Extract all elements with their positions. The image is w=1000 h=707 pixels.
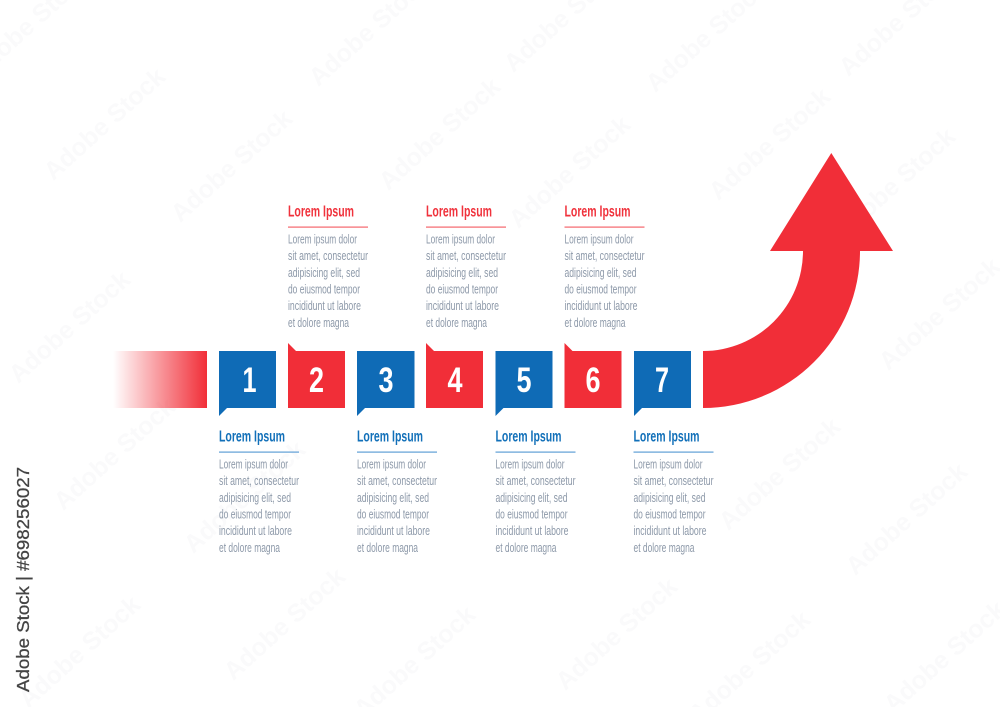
text block: step 5: incididunt ut labore xyxy=(496,524,569,538)
step 1 marker xyxy=(219,351,276,416)
text block: step 1: incididunt ut labore xyxy=(219,524,292,538)
watermark pattern: Adobe Stock xyxy=(374,72,506,196)
step 6 marker xyxy=(564,343,622,408)
watermark pattern: Adobe Stock xyxy=(714,412,846,536)
text block: step 3: do eiusmod tempor xyxy=(357,508,429,522)
watermark pattern: Adobe Stock xyxy=(829,122,961,246)
text block: step 6: do eiusmod tempor xyxy=(564,282,636,296)
text block: step 3: incididunt ut labore xyxy=(357,524,430,538)
text block: step 4: do eiusmod tempor xyxy=(426,282,498,296)
text block: step 2: adipisicing elit, sed xyxy=(288,266,360,280)
text block: step 4: Lorem Ipsum xyxy=(426,204,492,221)
step 5 marker xyxy=(496,351,552,416)
watermark pattern: Adobe Stock xyxy=(4,265,136,389)
text block: step 6: sit amet, consectetur xyxy=(564,249,644,263)
watermark pattern: Adobe Stock xyxy=(504,110,636,234)
text block: step 3: Lorem Ipsum xyxy=(357,429,423,446)
step 3 marker: 3 xyxy=(378,361,394,400)
text block: step 1: sit amet, consectetur xyxy=(219,474,299,488)
text block: step 7: incididunt ut labore xyxy=(634,524,707,538)
text block: step 4: et dolore magna xyxy=(426,316,487,330)
watermark pattern: Adobe Stock xyxy=(166,104,298,228)
text block: step 2: incididunt ut labore xyxy=(288,299,361,313)
watermark pattern: Adobe Stock xyxy=(219,562,351,686)
text block: step 2: Lorem Ipsum xyxy=(288,204,354,221)
watermark pattern: Adobe Stock xyxy=(39,62,171,186)
text block: step 4: incididunt ut labore xyxy=(426,299,499,313)
text block: step 6: adipisicing elit, sed xyxy=(564,266,637,280)
text block: step 6: incididunt ut labore xyxy=(564,299,638,313)
text block: step 6: Lorem ipsum dolor xyxy=(564,232,634,246)
text block: step 6: et dolore magna xyxy=(564,316,626,330)
text block: step 7: adipisicing elit, sed xyxy=(634,491,706,505)
large curved red arrow xyxy=(703,153,893,408)
text block: step 6: Lorem Ipsum xyxy=(564,204,630,221)
text block: step 4: adipisicing elit, sed xyxy=(426,266,498,280)
text block: step 2: do eiusmod tempor xyxy=(288,282,360,296)
text block: step 2 xyxy=(288,204,368,330)
text block: step 1: do eiusmod tempor xyxy=(219,508,291,522)
text block: step 7 xyxy=(634,429,714,555)
step 7 marker xyxy=(634,351,691,416)
text block: step 1 xyxy=(219,429,299,555)
watermark pattern: Adobe Stock xyxy=(49,392,181,516)
text block: step 4 xyxy=(426,204,506,330)
text block: step 3: sit amet, consectetur xyxy=(357,474,437,488)
watermark pattern: Adobe Stock xyxy=(841,457,973,581)
text block: step 3 xyxy=(357,429,437,555)
text block: step 7: et dolore magna xyxy=(634,541,695,555)
step 1 marker: 1 xyxy=(242,361,256,400)
text block: step 1: Lorem Ipsum xyxy=(219,429,285,446)
step 2 marker xyxy=(288,343,345,408)
text block: step 5: adipisicing elit, sed xyxy=(496,491,568,505)
watermark pattern: Adobe Stock xyxy=(179,435,311,559)
step 4 marker: 4 xyxy=(448,361,463,400)
fading red arrow tail xyxy=(113,351,207,408)
text block: step 3: et dolore magna xyxy=(357,541,418,555)
text block: step 1: adipisicing elit, sed xyxy=(219,491,291,505)
text block: step 5: sit amet, consectetur xyxy=(496,474,576,488)
text block: step 4: Lorem ipsum dolor xyxy=(426,232,495,246)
text block: step 5: et dolore magna xyxy=(496,541,557,555)
text block: step 2: Lorem ipsum dolor xyxy=(288,232,357,246)
watermark pattern: Adobe Stock xyxy=(704,82,836,206)
step 7 marker: 7 xyxy=(655,361,669,400)
text block: step 7: sit amet, consectetur xyxy=(634,474,714,488)
text block: step 7: do eiusmod tempor xyxy=(634,508,706,522)
text block: step 1: et dolore magna xyxy=(219,541,280,555)
step 6 marker: 6 xyxy=(586,361,600,400)
text block: step 3: adipisicing elit, sed xyxy=(357,491,429,505)
step 3 marker xyxy=(357,351,414,416)
step 5 marker: 5 xyxy=(516,361,532,400)
watermark pattern: Adobe Stock xyxy=(551,572,683,696)
text block: step 5: Lorem Ipsum xyxy=(496,429,562,446)
text block: step 2: sit amet, consectetur xyxy=(288,249,368,263)
text block: step 4: sit amet, consectetur xyxy=(426,249,506,263)
text block: step 3: Lorem ipsum dolor xyxy=(357,458,426,472)
text block: step 2: et dolore magna xyxy=(288,316,349,330)
text block: step 5: do eiusmod tempor xyxy=(496,508,568,522)
text block: step 1: Lorem ipsum dolor xyxy=(219,458,288,472)
step 4 marker xyxy=(426,343,483,408)
text block: step 6 xyxy=(564,204,644,330)
text block: step 5: Lorem ipsum dolor xyxy=(496,458,564,472)
stock id caption: Adobe Stock | #698256027 xyxy=(13,467,33,692)
text block: step 5 xyxy=(496,429,576,555)
text block: step 7: Lorem Ipsum xyxy=(634,429,700,446)
text block: step 7: Lorem ipsum dolor xyxy=(634,458,702,472)
step 2 marker: 2 xyxy=(309,361,324,400)
